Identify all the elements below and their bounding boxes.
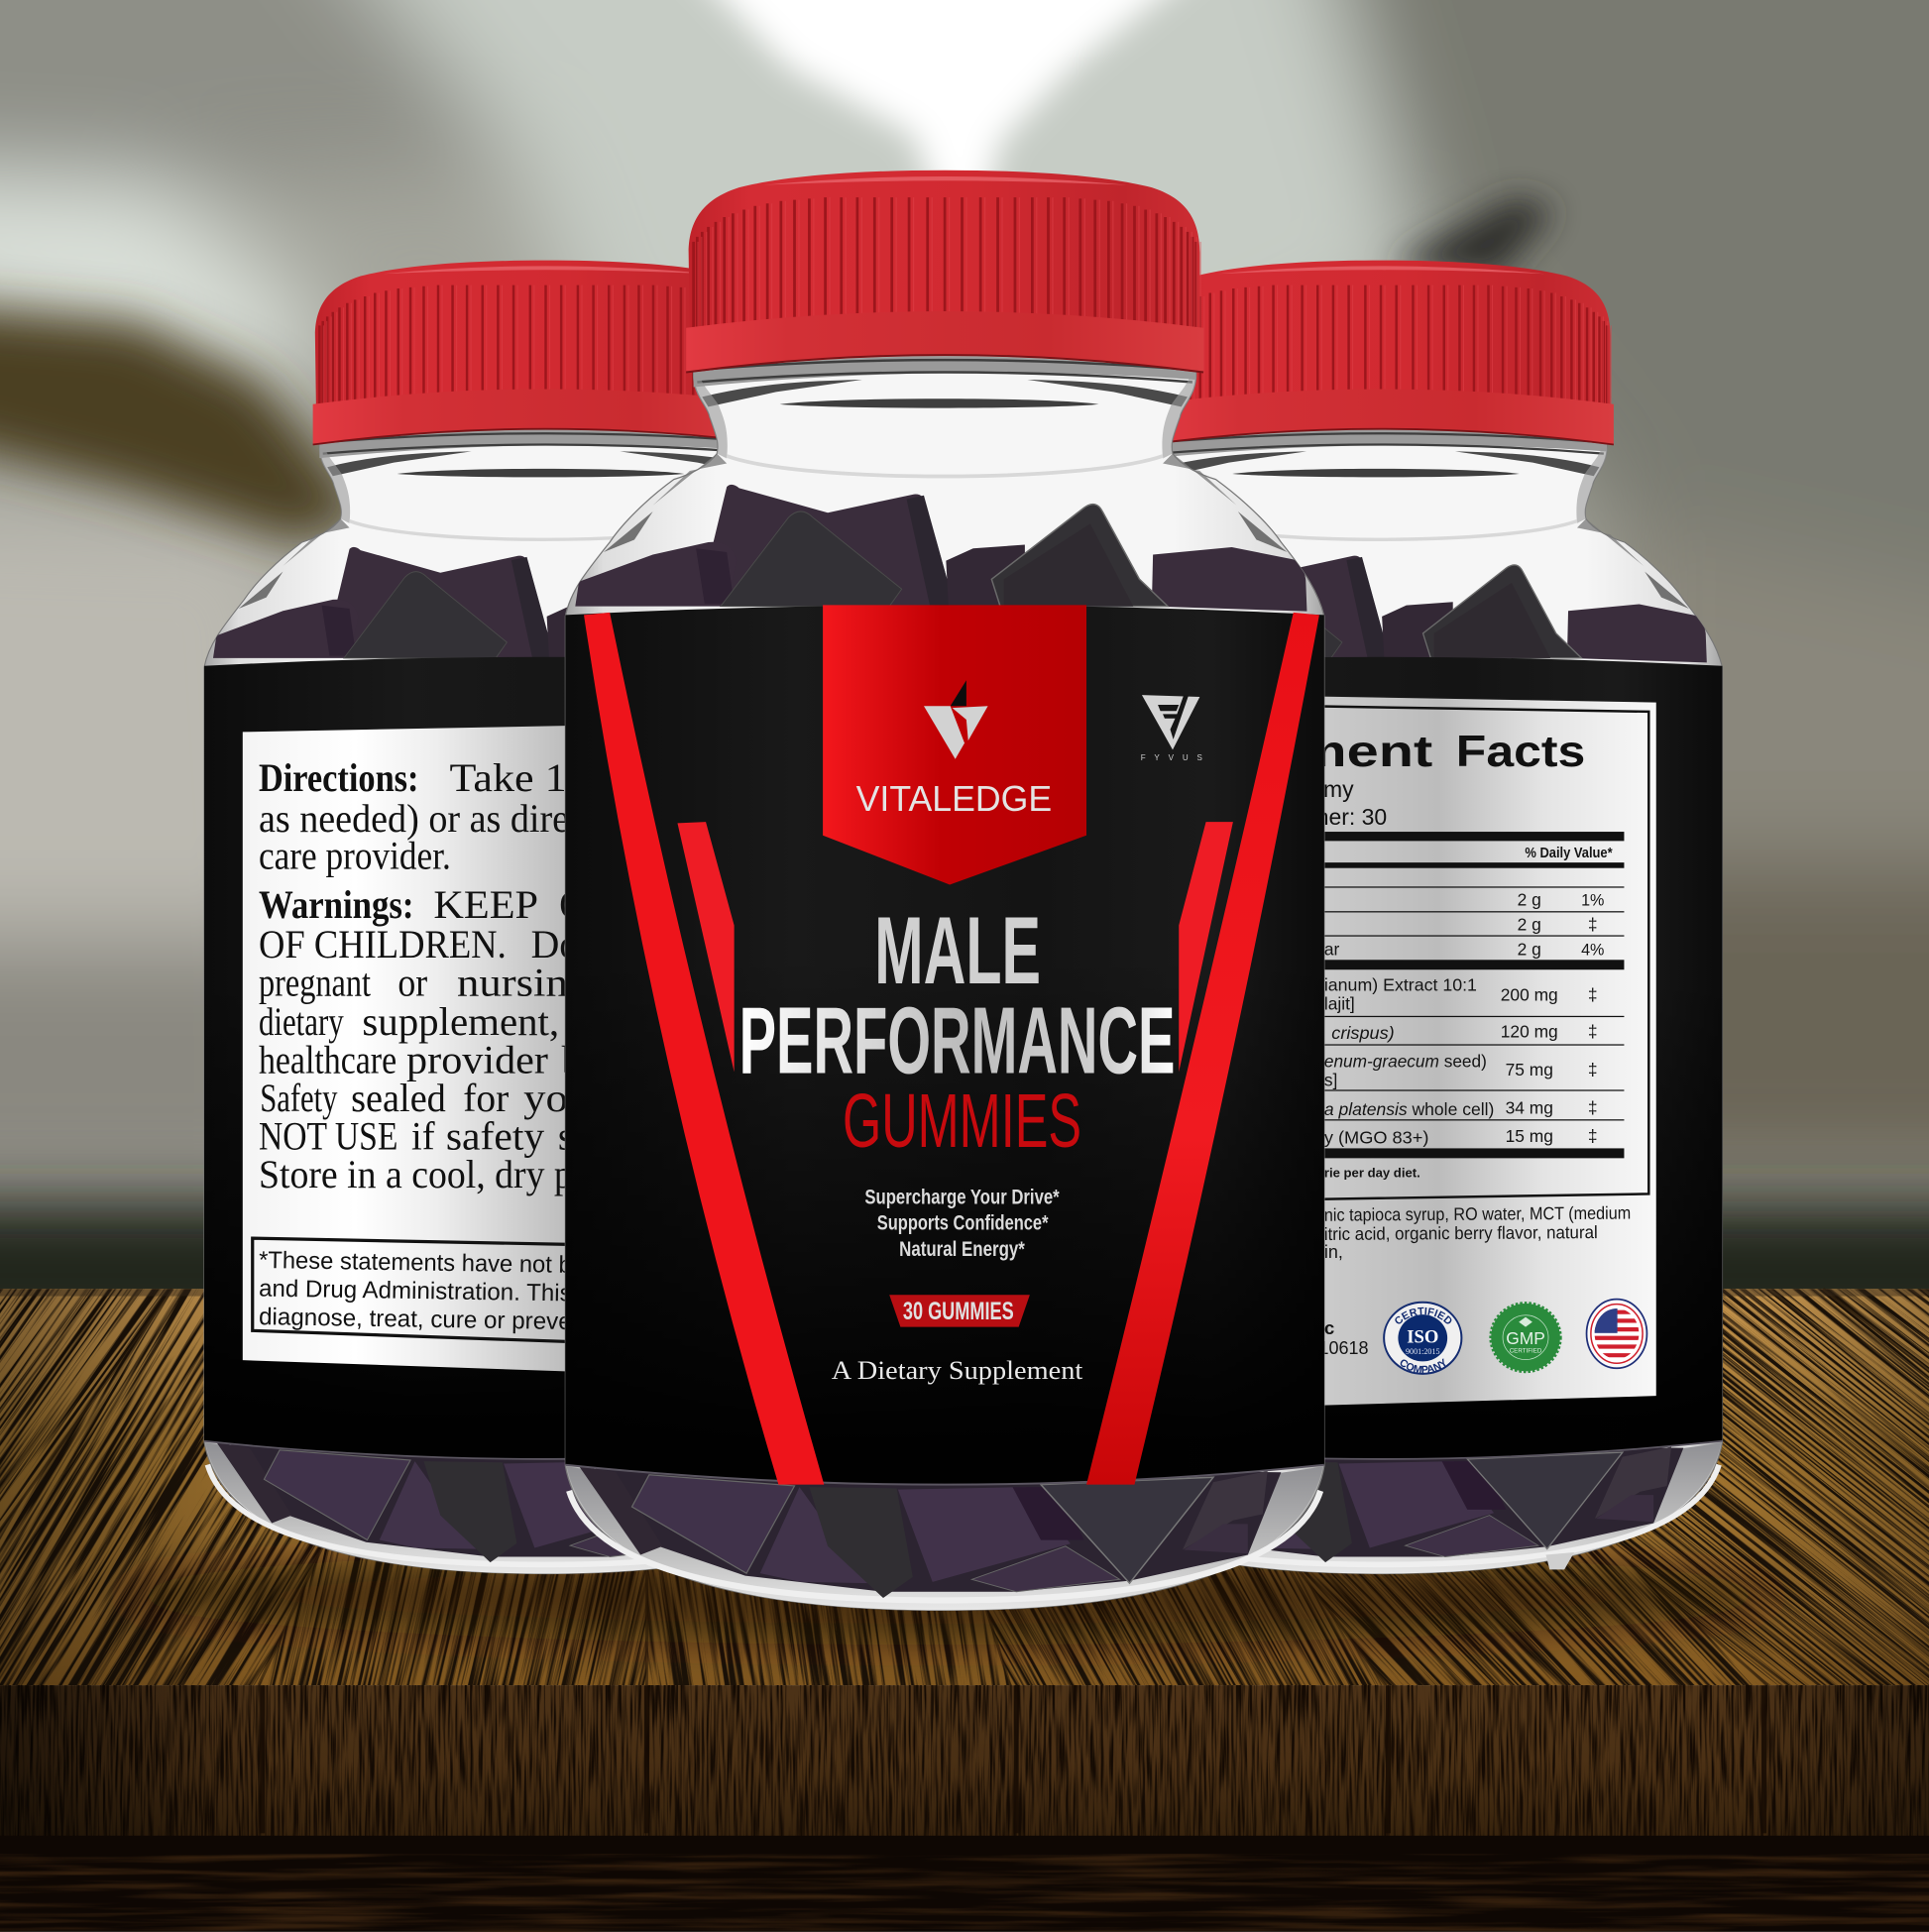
ingredients text: c — [1324, 1317, 1334, 1338]
directions text: as needed) or as dire — [259, 797, 569, 841]
benefit claims: Supports Confidence* — [877, 1211, 1049, 1234]
warnings text: healthcare — [259, 1039, 397, 1082]
disclaimer box: and Drug Administration. This — [259, 1276, 572, 1307]
facts table values: ‡ — [1588, 1098, 1598, 1118]
disclaimer box: *These statements have not b — [259, 1247, 572, 1279]
facts table values: ‡ — [1588, 914, 1598, 934]
serving info — [1316, 776, 1387, 830]
facts heading: ment — [1296, 728, 1432, 776]
warnings text: Do — [531, 923, 579, 966]
badge: USA flag — [1587, 1300, 1646, 1368]
badge: ISO certified — [1383, 1301, 1463, 1375]
facts heading — [1296, 728, 1585, 776]
facts table values: 2 g — [1518, 890, 1541, 910]
product title: GUMMIES — [843, 1079, 1081, 1164]
center bottle — [565, 170, 1324, 1610]
facts table values: 200 mg — [1501, 984, 1558, 1004]
warnings text: b — [562, 1039, 582, 1082]
right bottle foot detail — [1546, 1552, 1574, 1569]
facts table values: enum-graecum seed) — [1324, 1051, 1487, 1071]
table underside dark band — [0, 1836, 1929, 1932]
wooden table top — [0, 1289, 1929, 1685]
facts table values: 1% — [1581, 892, 1604, 910]
facts table values: 34 mg — [1506, 1098, 1553, 1118]
facts table rules — [1305, 832, 1624, 1158]
right bottle: supplement facts side — [1040, 261, 1722, 1574]
facts table values: % Daily Value* — [1525, 846, 1613, 861]
badge: ISO certified: COMPANY — [1400, 1358, 1445, 1373]
neck threads and glass reflections — [604, 356, 1288, 552]
label edge highlight — [565, 1465, 1324, 1485]
ribbed red cap — [686, 170, 1203, 373]
directions text: Take 1 — [450, 756, 567, 800]
badge: ISO certified: CERTIFIED — [1395, 1307, 1451, 1324]
warnings text: Warnings: — [259, 883, 414, 927]
red outer stripe left — [584, 613, 824, 1485]
facts table values: ‡ — [1588, 1022, 1598, 1042]
facts table values: 2 g — [1518, 939, 1541, 959]
badge: ISO certified: 9001:2015 — [1406, 1347, 1440, 1356]
glass bowl base — [565, 1460, 1324, 1610]
facts table values: y (MGO 83+) — [1324, 1127, 1428, 1147]
warnings text: if — [411, 1115, 435, 1159]
facts heading: Facts — [1456, 728, 1585, 776]
dietary supplement line: A Dietary Supplement — [832, 1356, 1083, 1385]
ingredients text — [1319, 1203, 1631, 1358]
icon: Fyvus logo: FYVUS — [1141, 753, 1202, 762]
gummies top — [575, 485, 1306, 612]
icon: Fyvus logo — [1141, 695, 1202, 762]
facts table values: lajit] — [1324, 994, 1355, 1014]
warnings text — [259, 883, 588, 1196]
disclaimer box: diagnose, treat, cure or preve — [259, 1304, 572, 1335]
facts table values: 120 mg — [1501, 1022, 1558, 1042]
count tag: 30 GUMMIES — [903, 1299, 1014, 1325]
left bottle: back label side — [204, 261, 887, 1574]
black label — [565, 605, 1324, 1485]
brand name: VITALEDGE — [856, 778, 1052, 819]
warnings text: Store in a cool, dry p — [259, 1153, 573, 1196]
serving info: my — [1323, 776, 1354, 802]
warnings text: supplement, — [362, 1000, 559, 1044]
product title: PERFORMANCE — [739, 988, 1175, 1094]
warnings text: NOT USE — [259, 1115, 397, 1159]
facts table values: 15 mg — [1506, 1126, 1553, 1146]
warnings text: Safety — [260, 1077, 338, 1120]
ingredients text: itric acid, organic berry flavor, natural — [1324, 1222, 1598, 1244]
facts table values: 75 mg — [1506, 1060, 1553, 1080]
facts table values: 4% — [1581, 941, 1604, 959]
ingredients text: 10618 — [1319, 1338, 1369, 1358]
red outer stripe right — [1086, 613, 1319, 1485]
warnings text: or — [397, 961, 427, 1004]
directions text — [259, 756, 569, 877]
red banner — [823, 605, 1086, 884]
benefit claims: Natural Energy* — [899, 1238, 1026, 1261]
badge: GMP certified: CERTIFIED — [1510, 1348, 1542, 1355]
red inner shard left — [677, 822, 735, 1072]
serving info: ner: 30 — [1316, 804, 1387, 830]
facts table values: ‡ — [1588, 1060, 1598, 1080]
red inner shard right — [1179, 822, 1233, 1072]
facts table values: ar — [1324, 939, 1340, 959]
facts table values: ‡ — [1588, 1126, 1598, 1146]
directions text: care provider. — [259, 834, 451, 877]
warnings text: s — [558, 1115, 573, 1159]
warnings text: nursin — [457, 961, 568, 1004]
table front edge — [0, 1685, 1929, 1837]
warnings text: KEEP — [433, 883, 538, 927]
warnings text: O — [559, 883, 588, 927]
facts frame — [1305, 706, 1648, 1199]
directions text: Directions: — [259, 756, 419, 800]
benefit claims — [864, 1186, 1060, 1261]
badge: GMP certified — [1491, 1304, 1560, 1371]
facts table values: ianum) Extract 10:1 — [1324, 974, 1477, 994]
ingredients text: nic tapioca syrup, RO water, MCT (medium — [1324, 1203, 1631, 1225]
badge: ISO certified: ISO — [1407, 1327, 1438, 1348]
warnings text: sealed — [351, 1077, 446, 1120]
front label artwork — [584, 605, 1319, 1485]
benefit claims: Supercharge Your Drive* — [864, 1186, 1060, 1208]
icon: Vitaledge logo — [924, 680, 988, 759]
gummies bottom — [579, 1466, 1281, 1598]
disclaimer box — [253, 1238, 572, 1342]
facts table values: a platensis whole cell) — [1324, 1099, 1494, 1119]
warnings text: for — [463, 1077, 509, 1120]
count tag — [889, 1295, 1030, 1327]
panel: directions and warnings sticker — [243, 726, 588, 1371]
facts table values: s] — [1324, 1071, 1337, 1090]
warnings text: OF CHILDREN. — [259, 923, 507, 966]
panel: supplement facts sticker — [1296, 696, 1656, 1406]
facts table values: crispus) — [1331, 1023, 1395, 1043]
facts table values — [1324, 846, 1613, 1181]
facts table values: rie per day diet. — [1324, 1166, 1420, 1181]
blurred room background — [0, 0, 1929, 1349]
warnings text: safety — [446, 1115, 544, 1159]
badge: GMP certified: GMP — [1506, 1328, 1545, 1348]
facts table values: ‡ — [1588, 984, 1598, 1004]
product title: MALE — [874, 896, 1041, 1004]
warnings text: yo — [523, 1077, 568, 1120]
glass body — [565, 373, 1324, 1610]
warnings text: dietary — [259, 1000, 344, 1044]
warnings text: pregnant — [259, 961, 371, 1004]
facts table values: 2 g — [1518, 914, 1541, 934]
warnings text: provider — [406, 1039, 548, 1082]
ingredients text: in, — [1324, 1242, 1343, 1262]
bottle shadow on table — [111, 1546, 1786, 1645]
product title — [739, 896, 1175, 1164]
